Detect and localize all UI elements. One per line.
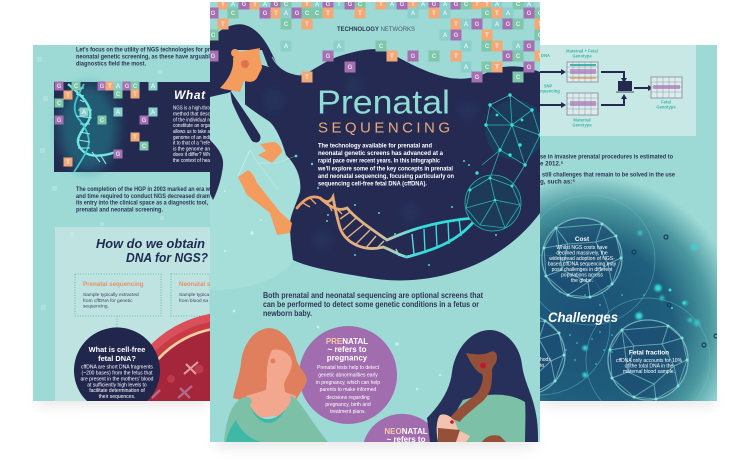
illustration: mother with baby xyxy=(427,330,538,442)
letter tiles: center: G xyxy=(295,11,300,17)
card: prenatal sequencing: Sample typically extracted xyxy=(83,292,139,298)
letter tiles: center: A xyxy=(443,11,448,17)
letter tiles: center: T xyxy=(221,22,225,28)
grid: maternal + fetal genotype xyxy=(567,62,598,82)
letter tiles: left page: G xyxy=(57,118,62,124)
letter tiles: left page: C xyxy=(116,92,121,98)
decoration: faint squares left xyxy=(37,57,164,310)
callout: prenatal definition: genetic abnormalities early xyxy=(318,372,378,378)
letter tiles: center: T xyxy=(538,54,542,60)
text: what is NGS body: constitute an orga xyxy=(173,123,210,129)
letter tiles: center: T xyxy=(390,54,394,60)
panel: left page xyxy=(33,45,210,401)
illustration: pregnant woman xyxy=(210,24,302,290)
letter tiles: center: G xyxy=(454,33,459,39)
letter tiles: left page: C xyxy=(133,84,138,90)
labels: genotype diagram: Fetal xyxy=(661,100,671,104)
text: invasive procedures paragraph: g, such as:⁵ xyxy=(540,178,575,186)
callout: what is cell-free fetal DNA: (~200 bases) from the fetus that xyxy=(81,370,153,376)
letter tiles: center: G xyxy=(527,11,532,17)
shadow: pages xyxy=(38,392,714,448)
letter tiles: center: G xyxy=(211,54,216,60)
heading: how do we obtain: How do we obtain xyxy=(96,237,205,251)
letter tiles: center: T xyxy=(305,75,309,81)
letter tiles: center: A xyxy=(516,44,521,50)
callout: what is cell-free fetal DNA: are present in the mothers' blood xyxy=(81,376,154,382)
background: navy wave xyxy=(245,49,540,280)
letter tiles: center: C xyxy=(231,11,236,17)
callout: neonatal definition: ~ refers to xyxy=(387,435,426,444)
callout: what is cell-free fetal DNA: facilitate determination of xyxy=(89,388,145,394)
icon: left sphere xyxy=(540,317,566,393)
lower arm xyxy=(238,170,292,235)
callout: prenatal definition: ~ refers to xyxy=(328,345,367,354)
letter tiles: center: A xyxy=(495,22,500,28)
letter tiles: center: C xyxy=(211,33,216,39)
labels: genotype diagram: Genotype xyxy=(572,54,592,58)
letter tiles: left page: G xyxy=(57,84,62,90)
heading: how do we obtain xyxy=(96,238,208,262)
callout: what is cell-free fetal DNA: their sequences. xyxy=(99,394,135,400)
letter tiles: center: G xyxy=(411,54,416,60)
line: connector xyxy=(116,316,118,327)
text: HGP paragraph: its entry into the clinical space as a diagnostic tool, xyxy=(76,200,208,206)
letter tiles: center: T xyxy=(432,11,436,17)
labels: genotype diagram xyxy=(536,48,676,128)
hair strand xyxy=(230,90,261,142)
text: cost: based cffDNA sequencing may xyxy=(548,262,617,268)
letter tiles: center: G xyxy=(348,2,353,8)
illustration: woman with orange hair xyxy=(224,328,328,442)
letter tiles: center: A xyxy=(315,2,320,8)
card: neonatal sequencing: Neonatal s xyxy=(179,281,211,288)
letter tiles: left page: G xyxy=(142,118,147,124)
letter tiles: center: A xyxy=(284,11,289,17)
hair streak xyxy=(272,57,300,75)
icon: cost sphere xyxy=(542,218,622,298)
grid: maternal genotype xyxy=(567,93,598,115)
letter tiles: left page: C xyxy=(100,118,105,124)
rings: challenges xyxy=(632,235,718,347)
letter tiles: center: A xyxy=(263,2,268,8)
text: cost xyxy=(548,236,617,284)
letter tiles: center: A xyxy=(390,2,395,8)
letter tiles: center: T xyxy=(337,2,341,8)
labels: genotype diagram: Maternal + Fetal xyxy=(566,48,598,54)
card: prenatal sequencing: from cffDNA for genetic xyxy=(83,298,133,304)
text: fetal fraction: cffDNA only accounts for 10% xyxy=(616,358,683,364)
panel: how do we obtain DNA xyxy=(55,227,210,401)
dress xyxy=(210,92,300,290)
text: what is NGS body: NGS is a high-thro xyxy=(173,106,210,112)
icon: DNA helix xyxy=(58,84,118,172)
text: optional screens paragraph: Both prenatal and neonatal sequencing are optional screens that xyxy=(263,290,483,300)
title: Prenatal: Prenatal xyxy=(317,84,450,120)
letter tiles: center: G xyxy=(475,22,480,28)
letter tiles: center xyxy=(208,0,546,82)
letter tiles: center: T xyxy=(495,44,499,50)
letter tiles: left page: G xyxy=(100,84,105,90)
letter tiles: left page: T xyxy=(133,92,137,98)
letter tiles: center: T xyxy=(274,11,278,17)
callout: prenatal definition: PRENATAL xyxy=(326,337,368,346)
glows: navy wave xyxy=(267,79,474,246)
letter tiles: center: T xyxy=(538,22,542,28)
text: cost: pose challenges in different xyxy=(552,267,613,273)
illustration: low-poly spheres xyxy=(465,93,545,231)
letter tiles: left page: T xyxy=(133,135,137,141)
text: optional screens paragraph: can be performed to detect some genetic conditions in a fetus or xyxy=(263,299,480,309)
letter tiles: left page: G xyxy=(116,152,121,158)
callout: what is cell-free fetal DNA: What is cell-free xyxy=(89,345,145,354)
letter tiles: center: G xyxy=(527,44,532,50)
ear xyxy=(231,49,239,57)
letter tiles: center: C xyxy=(315,11,320,17)
intro text: left page: Let's focus on the utility of NGS technologies for pr xyxy=(76,46,211,54)
text: cost: the globe. xyxy=(571,278,593,284)
letter tiles: center: C xyxy=(516,22,521,28)
panel: right page xyxy=(540,45,717,401)
letter tiles: center: A xyxy=(443,2,448,8)
labels: genotype diagram: Sequencing xyxy=(536,88,560,94)
text: HGP paragraph: and time required to conduct NGS decreased dram xyxy=(76,193,210,200)
letter tiles: left page: T xyxy=(66,160,70,166)
letter tiles: center: A xyxy=(284,44,289,50)
text: what is NGS body: does it differ? Wh xyxy=(173,152,210,158)
callout: what is cell-free fetal DNA: cffDNA are short DNA fragments xyxy=(81,364,153,370)
letter tiles: center: C xyxy=(485,65,490,71)
text: intro paragraph: The technology available for prenatal and xyxy=(318,142,432,150)
upper hand xyxy=(258,142,282,163)
panel: challenges glow xyxy=(540,178,717,401)
card: neonatal sequencing: Sample typica xyxy=(179,292,209,298)
letter tiles: left page: A xyxy=(151,84,156,90)
callout: prenatal definition: treatment plans. xyxy=(330,409,366,415)
cheek xyxy=(241,60,249,68)
letter tiles: center: G xyxy=(506,22,511,28)
text: HGP paragraph: The completion of the HGP in 2003 marked an era w xyxy=(76,186,210,193)
callout: prenatal definition: parents to make informed xyxy=(320,387,377,393)
text: methods fragment: to xyxy=(540,363,544,369)
letter tiles: center: T xyxy=(495,65,499,71)
letter tiles: center: A xyxy=(464,44,469,50)
labels: genotype diagram: Genotype xyxy=(572,122,592,128)
letter tiles: center: T xyxy=(485,33,489,39)
neck and face xyxy=(220,48,262,92)
heading: challenges: Challenges xyxy=(548,309,618,325)
letter tiles: center: C xyxy=(379,44,384,50)
letter tiles: center: G xyxy=(274,2,279,8)
letter tiles: center: A xyxy=(443,33,448,39)
arrows: genotype flow xyxy=(540,69,653,108)
letter tiles: center: C xyxy=(464,2,469,8)
text: invasive procedures paragraph xyxy=(540,154,675,186)
letter tiles: center: A xyxy=(421,2,426,8)
text: optional screens paragraph xyxy=(263,290,483,318)
text: what is NGS body: the context of hea xyxy=(173,158,210,164)
heading: how do we obtain: DNA for NGS? xyxy=(126,251,208,265)
card: neonatal sequencing xyxy=(171,274,211,316)
letter tiles: center: T xyxy=(253,2,257,8)
panel: center page xyxy=(208,0,546,444)
text: optional screens paragraph: newborn baby. xyxy=(263,308,312,318)
callout: neonatal definition xyxy=(364,414,440,444)
letter tiles: center: G xyxy=(326,54,331,60)
text: cost: widespread adoption of NGS- xyxy=(549,256,615,262)
text: intro paragraph: rapid pace over recent years. In this infographic xyxy=(318,158,440,164)
letter tiles: center: T xyxy=(454,54,458,60)
letter tiles: center: C xyxy=(516,2,521,8)
letter tiles: left page xyxy=(54,82,158,166)
callout: prenatal definition xyxy=(299,326,397,424)
panel: what is NGS xyxy=(51,78,210,178)
letter tiles: center: A xyxy=(464,22,469,28)
letter tiles: left page: A xyxy=(151,110,156,116)
letter tiles: center: T xyxy=(305,22,309,28)
callout: prenatal definition: in pregnancy, which can help xyxy=(316,380,380,386)
letter tiles: left page: A xyxy=(82,110,87,116)
callout: prenatal definition: pregnancy, birth and xyxy=(325,402,371,408)
text: invasive procedures paragraph: se in invasive prenatal procedures is estimated to xyxy=(540,154,673,160)
text: cost: declined massively, the xyxy=(556,250,608,256)
letter tiles: center: T xyxy=(305,2,309,8)
text: methods fragment: hods xyxy=(540,357,551,363)
letter tiles: center: T xyxy=(379,2,383,8)
callout: what is cell-free fetal DNA: at sufficiently high levels to xyxy=(87,382,147,388)
letter tiles: left page: T xyxy=(108,84,112,90)
heading: What: What is NGS? xyxy=(174,88,261,102)
panel: genotype diagram xyxy=(536,45,696,136)
particles: challenges xyxy=(559,230,700,378)
letter tiles: left page: A xyxy=(116,110,121,116)
letter tiles: center: G xyxy=(263,11,268,17)
text: methods fragment xyxy=(540,357,551,367)
text: HGP paragraph xyxy=(76,186,210,214)
letter tiles: center: C xyxy=(485,44,490,50)
letter tiles: center: G xyxy=(348,65,353,71)
particles: center xyxy=(224,155,497,390)
text: fetal fraction xyxy=(616,350,683,375)
letter tiles: center: G xyxy=(475,75,480,81)
hair xyxy=(210,24,302,110)
text: intro paragraph: and neonatal sequencing, focusing particularly on xyxy=(318,173,454,180)
text: what is NGS body: allows us to take a xyxy=(173,129,210,135)
card: prenatal sequencing xyxy=(75,274,161,316)
letter tiles: left page: G xyxy=(125,84,130,90)
letter tiles: left page: T xyxy=(66,93,70,99)
text: invasive procedures paragraph: e 2012.⁵ xyxy=(540,160,564,168)
letter tiles: left page: A xyxy=(116,84,121,90)
constellation xyxy=(238,150,296,190)
text: fetal fraction: of the total DNA in the xyxy=(625,364,674,370)
letter tiles: center: C xyxy=(516,75,521,81)
text: what is NGS body: it to that of a "refe xyxy=(173,140,210,146)
subtitle: Sequencing: SEQUENCING xyxy=(318,120,450,136)
illustration: DNA double helix xyxy=(297,197,475,257)
labels: genotype diagram: SNP xyxy=(544,84,553,88)
letter tiles: center: G xyxy=(211,11,216,17)
labels: genotype diagram: Genotype xyxy=(656,104,676,110)
letter tiles: center: C xyxy=(516,54,521,60)
letter tiles: center: G xyxy=(242,2,247,8)
card: neonatal sequencing: from blood sa xyxy=(179,298,208,304)
letter tiles: center: C xyxy=(485,11,490,17)
text: what is NGS body: method that desc xyxy=(173,112,210,118)
intro text: left page: diagnostics field the most. xyxy=(76,60,146,68)
text: intro paragraph: sequencing cell-free fetal DNA (cffDNA). xyxy=(318,180,427,188)
letter tiles: center: T xyxy=(411,2,415,8)
letter tiles: center: C xyxy=(538,11,543,17)
hair back xyxy=(210,140,223,200)
text: fetal fraction: maternal blood sample. xyxy=(623,369,675,375)
logo: Technology Networks: TECHNOLOGY NETWORKS xyxy=(337,26,416,33)
text: cost: Whilst NGS costs have xyxy=(556,245,608,251)
letter tiles: center: G xyxy=(400,2,405,8)
text: cost: Cost xyxy=(575,236,590,243)
letter tiles: center: G xyxy=(326,2,331,8)
letter tiles: center: A xyxy=(464,65,469,71)
letter tiles: center: A xyxy=(231,2,236,8)
labels: genotype diagram: DNA xyxy=(541,53,550,58)
callout: what is cell-free fetal DNA xyxy=(74,327,160,401)
intro text: left page xyxy=(76,46,211,68)
card: prenatal sequencing: sequencing. xyxy=(83,304,109,310)
letter tiles: center: C xyxy=(432,54,437,60)
letter tiles: center: G xyxy=(432,2,437,8)
text: fetal fraction: Fetal fraction xyxy=(629,350,669,356)
icon: laptop xyxy=(616,81,634,93)
letter tiles: center: C xyxy=(358,2,363,8)
letter tiles: center: T xyxy=(326,11,330,17)
text: intro paragraph xyxy=(317,142,454,188)
letter tiles: left page: C xyxy=(142,144,147,150)
illustration: blood vessel xyxy=(147,314,210,401)
text: HGP paragraph: prenatal and neonatal screening. xyxy=(76,206,163,214)
text: intro paragraph: neonatal genetic screens has advanced at a xyxy=(318,150,443,157)
text: what is NGS body xyxy=(173,106,210,164)
letter tiles: center: T xyxy=(495,11,499,17)
text: what is NGS body: of the individual n xyxy=(173,118,210,124)
letter tiles: center: C xyxy=(538,33,543,39)
callout: neonatal definition: NEONATAL xyxy=(384,427,428,436)
text: cost: populations across xyxy=(561,272,603,278)
letter tiles: center: C xyxy=(284,2,289,8)
letter tiles: center: T xyxy=(454,22,458,28)
grid: fetal genotype xyxy=(651,77,682,98)
letter tiles: center: A xyxy=(495,2,500,8)
letter tiles: center: G xyxy=(506,54,511,60)
icon: fetal fraction sphere xyxy=(608,320,688,400)
letter tiles: center: T xyxy=(358,11,362,17)
callout: prenatal definition: decisions regarding xyxy=(326,395,370,401)
letter tiles: center: G xyxy=(454,2,459,8)
accent: swoosh xyxy=(432,219,540,279)
text: what is NGS body: is the genome an xyxy=(173,146,210,152)
letter tiles: center: T xyxy=(221,2,225,8)
letter tiles: center: G xyxy=(527,65,532,71)
callout: what is cell-free fetal DNA: fetal DNA? xyxy=(98,354,136,363)
letter tiles: center: A xyxy=(527,2,532,8)
labels: genotype diagram: Maternal xyxy=(573,118,591,122)
letter tiles: center: A xyxy=(411,11,416,17)
text: invasive procedures paragraph: still challenges that remain to be solved in the use xyxy=(542,172,675,178)
callout: prenatal definition: pregnancy xyxy=(327,354,368,362)
letter tiles: center: A xyxy=(506,11,511,17)
text: intro paragraph: we'll explore some of the key concepts in prenatal xyxy=(317,166,453,172)
letter tiles: center: T xyxy=(485,2,489,8)
card: prenatal sequencing: Prenatal sequencing xyxy=(83,281,144,288)
text: what is NGS body: genome of an indi xyxy=(173,135,210,141)
letter tiles: center: C xyxy=(305,11,310,17)
letter tiles: left page: C xyxy=(74,84,79,90)
letter tiles: left page: C xyxy=(57,101,62,107)
callout: prenatal definition: Prenatal tests help to detect xyxy=(317,365,380,371)
intro text: left page: neonatal genetic screening, as these have arguabl xyxy=(76,54,210,60)
letter tiles: center: C xyxy=(284,22,289,28)
letter tiles: center: A xyxy=(337,44,342,50)
letter tiles: center: T xyxy=(475,2,479,8)
